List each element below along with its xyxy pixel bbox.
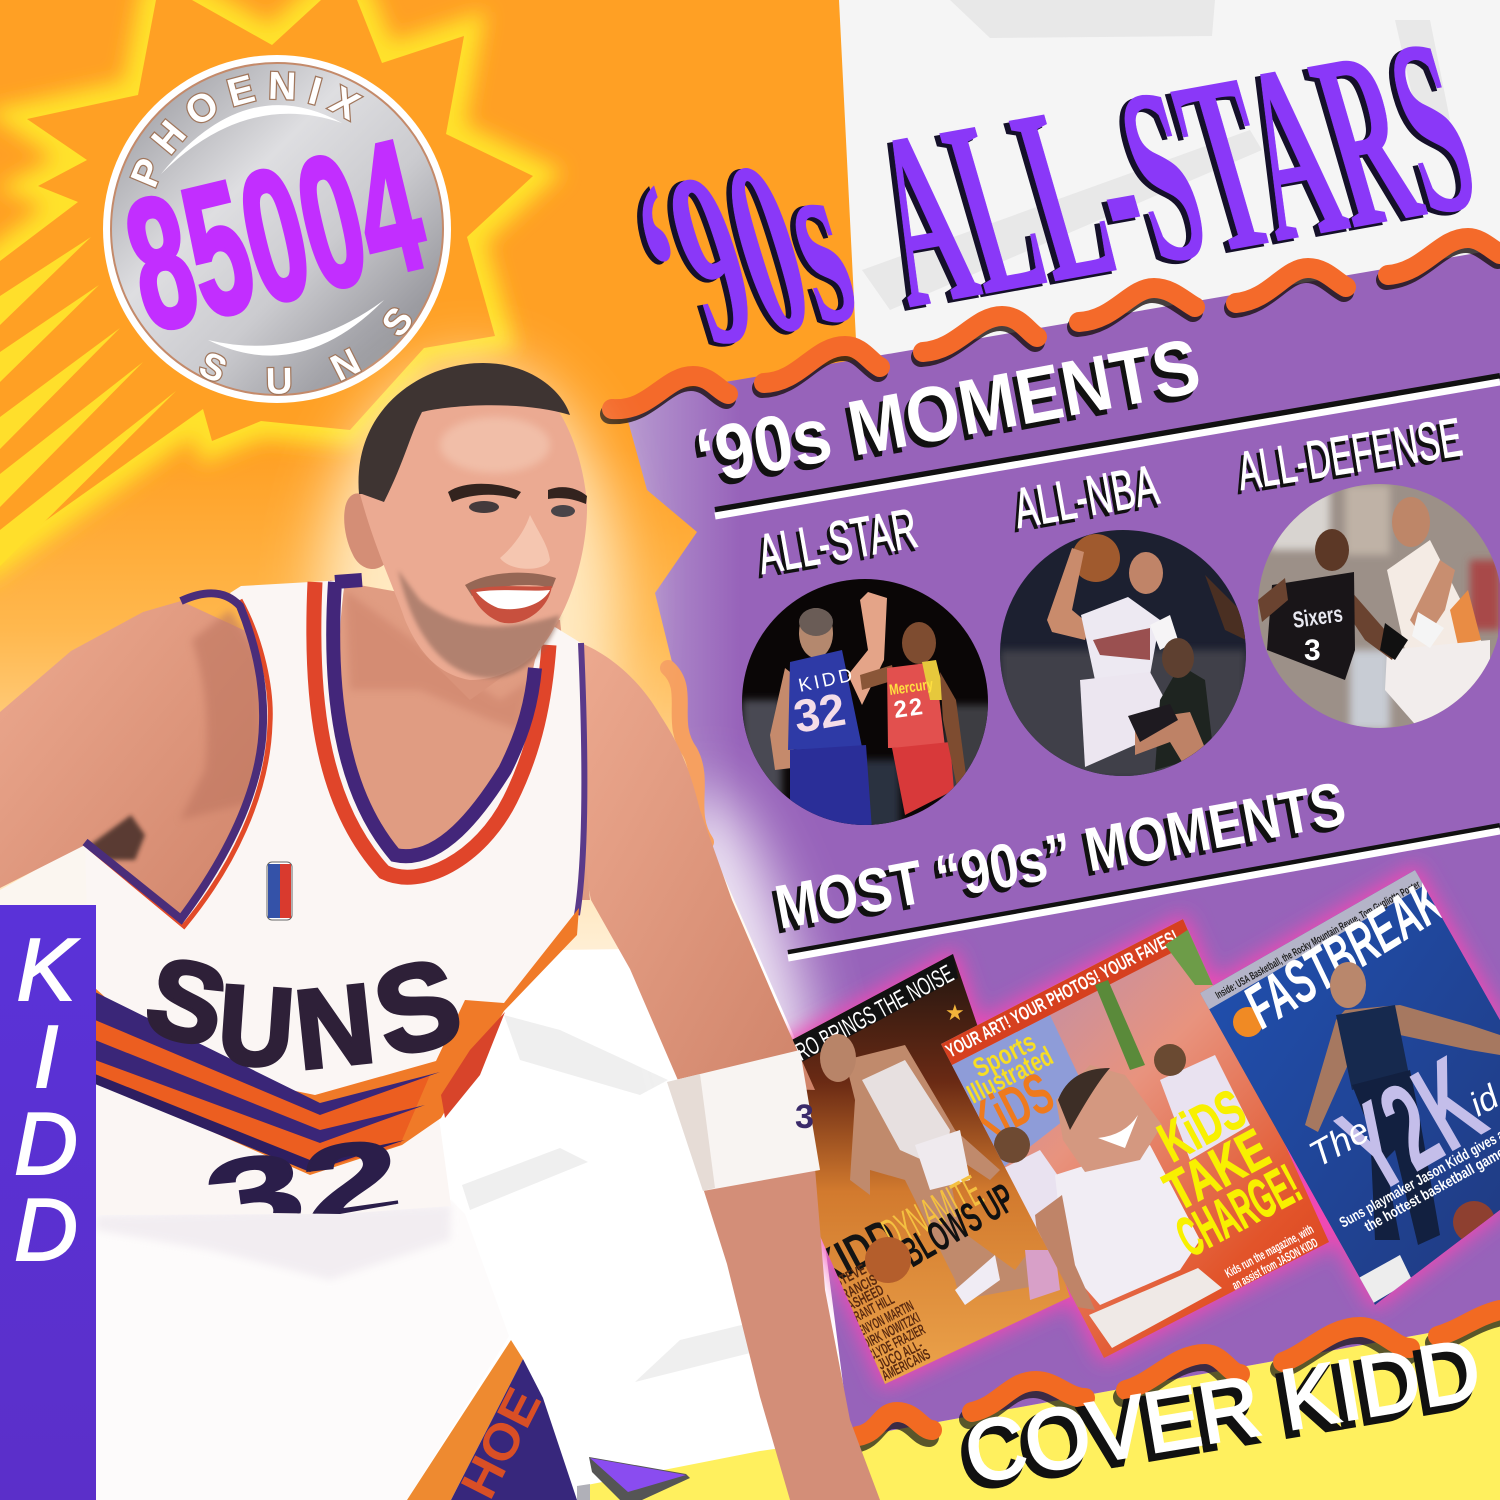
red side patch [441, 1012, 505, 1118]
player arms [1305, 1005, 1500, 1132]
basketball [1453, 1201, 1495, 1243]
label: ALL-STAR fill: ALL-STAR [753, 496, 922, 586]
chest shade [345, 590, 530, 730]
jersey word SUNS: N [289, 960, 380, 1093]
shorts purple trim [451, 1359, 577, 1500]
jersey word SUNS: S [361, 932, 473, 1083]
player body [845, 1045, 1040, 1300]
teammate arm [860, 665, 895, 690]
banner text: YOUR ART! YOUR PHOTOS! YOUR FAVES! [943, 927, 1182, 1062]
player wristband [1150, 615, 1178, 650]
defender [1155, 665, 1212, 770]
KIDD vertical text: K [17, 920, 79, 1019]
red banner [941, 919, 1193, 1066]
Kidd raised arm [848, 592, 887, 705]
Iverson wrist band [1380, 623, 1408, 660]
red lower fan [95, 1010, 430, 1172]
cover word BLOWS UP: BLOWS UP [893, 1174, 1022, 1276]
Kidd jersey [1055, 1145, 1200, 1305]
neck [395, 560, 550, 700]
label: ALL-NBA: ALL-NBA [1006, 457, 1160, 544]
teammate arm right [940, 672, 966, 784]
title: '90s [602, 102, 880, 407]
shorts [96, 1200, 509, 1500]
badge number: 85004: 85004 [109, 101, 441, 371]
jersey word SUNS [135, 932, 473, 1093]
crowd [1000, 650, 1246, 780]
heading: '90s MOMENTS: ‘90s MOMENTS [685, 327, 1203, 507]
panel fade to white near arm [639, 773, 861, 1287]
KIDD vertical text: I [34, 1007, 58, 1106]
wristband [667, 1050, 820, 1191]
kid left [1000, 1150, 1075, 1240]
heading: MOST "90s" MOMENTS: MOST “90s” MOMENTS [766, 775, 1347, 948]
player head [1129, 552, 1163, 594]
teammate shorts [892, 742, 954, 815]
armpit shade [90, 815, 145, 860]
Kids Take Charge: TAKE [1154, 1116, 1279, 1223]
Kidd head [1056, 1065, 1162, 1172]
purple panel [620, 249, 1500, 1438]
squiggles shadow [610, 243, 1498, 414]
orange fan [95, 908, 579, 1175]
heading: MOST "90s" MOMENTS fill: MOST “90s” MOMENTS [770, 770, 1351, 943]
cover side text: DIRK NOWITZKI [860, 1309, 923, 1353]
top black banner [745, 954, 958, 1090]
wristband number: 3 [795, 1098, 814, 1136]
right eye [551, 505, 575, 517]
background: white top right [839, 0, 1500, 420]
left arm [0, 601, 265, 925]
squiggles orange [858, 1310, 1500, 1436]
KIDD vertical text: D [14, 1180, 78, 1279]
title: '90s: ‘90s [602, 104, 875, 407]
jersey left armhole orange trim [90, 600, 270, 926]
crowd left [742, 696, 786, 796]
cover side text: JUCO ALL- [875, 1337, 926, 1374]
cover side text: GRANT HILL [845, 1291, 897, 1329]
right armhole trim [577, 643, 584, 915]
head [344, 363, 587, 700]
Kidd jersey orange [1450, 590, 1481, 645]
basketball [1072, 534, 1120, 582]
background: yellow bottom band [582, 1320, 1500, 1500]
shoe right [1025, 1250, 1060, 1300]
Kidd arm [1410, 560, 1455, 640]
KIDD vertical text [14, 920, 79, 1279]
Kidd jersey [1387, 540, 1481, 650]
cover side text: FRANCIS [833, 1271, 880, 1307]
Kids Take Charge: KiDS [1148, 1077, 1255, 1174]
top strip [1200, 870, 1425, 1010]
mouth [470, 586, 552, 623]
photo circle: all-star high five [742, 578, 995, 830]
teeth [476, 590, 550, 609]
blurred crowd top [1345, 485, 1390, 555]
orange side squiggle [668, 668, 706, 842]
cover side text: RASHEED [838, 1281, 887, 1318]
right eyebrow [548, 487, 587, 504]
squiggles shadow [855, 1317, 1497, 1443]
sunburst rays [0, 237, 176, 566]
squiggles orange [612, 238, 1500, 409]
heading: COVER KIDD fill: COVER KIDD [958, 1321, 1487, 1500]
player: Jason Kidd [0, 360, 880, 1500]
Iverson arm [1345, 590, 1400, 660]
Kidd hair [1058, 1068, 1110, 1130]
player shorts and legs [1352, 1070, 1440, 1245]
teammate trim [922, 660, 942, 700]
Iverson left arm [1258, 578, 1288, 622]
Kidd smile [1098, 1115, 1138, 1148]
defender arm [1205, 575, 1246, 640]
jersey word SUNS: S [135, 932, 238, 1071]
label: ALL-NBA [1006, 453, 1163, 544]
cover blurb: an assist from JASON KIDD [1229, 1235, 1320, 1293]
shorts orange trim [407, 1340, 523, 1500]
left eye [469, 501, 499, 513]
forehead highlight [440, 417, 550, 473]
jersey left armhole purple trim [85, 593, 263, 919]
banner text: ERO BRINGS THE NOISE [782, 960, 958, 1071]
kid right [1160, 1055, 1250, 1160]
cactus [1095, 980, 1145, 1070]
Suns logo [1233, 1007, 1263, 1037]
player knee brace [1128, 704, 1178, 742]
Kidd shorts [790, 745, 872, 830]
player jersey [1081, 597, 1160, 680]
left shoulder shade [180, 610, 262, 820]
defender head [1162, 638, 1194, 678]
badge bottom crescent [208, 300, 384, 356]
teammate text: Mercury [888, 676, 935, 699]
Iverson head [1315, 529, 1349, 571]
right shoulder and arm [570, 643, 815, 1090]
chest and neck [310, 580, 590, 900]
cover word DYNAMITE: DYNAMITE [875, 1166, 990, 1259]
title: '90s fill: ‘90s [607, 102, 880, 405]
magazine: SLAM-style Kidd cover [740, 950, 1080, 1390]
magazine pink glow [745, 870, 1500, 1384]
cover side text: KENYON MARTIN [850, 1297, 917, 1343]
player leg [1135, 712, 1204, 761]
NBA logo [267, 862, 292, 920]
heading: '90s MOMENTS fill: ‘90s MOMENTS [689, 321, 1207, 501]
teammate jersey [887, 662, 945, 748]
basketball [865, 1237, 911, 1283]
SI logo line 2: Illustrated [962, 1041, 1058, 1109]
orange squiggles top [610, 238, 1500, 414]
jersey word SUNS: U [214, 961, 298, 1091]
Kids Take Charge [1148, 1077, 1310, 1269]
sunburst star [0, 0, 533, 553]
SI logo KIDS: KiDS [958, 1060, 1064, 1157]
cover blurb [1222, 1221, 1320, 1305]
white patch left of jersey [0, 842, 100, 905]
sunburst glow [0, 0, 533, 553]
blurred crowd [1270, 490, 1330, 550]
cover side text: CLYDE FRAZIER [865, 1321, 928, 1365]
mustache [465, 573, 556, 596]
background: white lower area [0, 948, 900, 1500]
background: pale grey shapes lower [462, 1015, 762, 1382]
purple stripe 3 [95, 1074, 405, 1172]
cactus top [1165, 925, 1215, 985]
blurred crowd red [1470, 560, 1500, 630]
neckline orange trim [314, 582, 549, 877]
KIDD side bar [0, 905, 96, 1500]
player jersey [862, 1060, 950, 1170]
badge: Phoenix Suns 85004 [103, 55, 451, 403]
neckline purple trim [333, 580, 535, 856]
blue left border [950, 1015, 1090, 1170]
barcode [1355, 1255, 1412, 1305]
SI logo: Sports [968, 1027, 1041, 1083]
jersey stripes [1093, 628, 1150, 660]
teammate number: 22 [892, 693, 926, 724]
badge text: SUNS: SUNS [198, 307, 412, 396]
cover side text: STEVE [831, 1261, 869, 1292]
purple stripe 2 [95, 1040, 425, 1143]
Kidd head [799, 608, 833, 658]
Kidd blue jersey [788, 650, 862, 750]
cover blurb: of the Phoenix Suns [1236, 1258, 1307, 1305]
badge top crescent [161, 105, 342, 174]
player shorts [1080, 672, 1168, 767]
label: ALL-STAR [750, 496, 922, 590]
stubble [398, 570, 560, 678]
cover side text: AMERICANS [879, 1346, 933, 1385]
label: ALL-NBA fill: ALL-NBA [1009, 453, 1163, 540]
crowd centre [860, 760, 900, 830]
hair [359, 363, 570, 502]
Kidd head [1392, 497, 1430, 547]
photo circle: all-NBA layup [1000, 530, 1246, 780]
jersey number: 32 [198, 1115, 408, 1264]
teammate head [902, 622, 936, 664]
stars: ★ [945, 1000, 965, 1025]
label: ALL-STAR: ALL-STAR [750, 500, 919, 590]
Kids Take Charge: CHARGE! [1166, 1152, 1310, 1269]
kid left head [994, 1127, 1030, 1163]
shorts fold shading [96, 1205, 451, 1280]
Kidd hair [799, 608, 833, 636]
magazine: Fastbreak Y2Kid [1200, 865, 1500, 1305]
divider line bottom [788, 826, 1500, 958]
wristband shade [667, 1074, 715, 1191]
Kidd number: 32 [790, 683, 849, 743]
Iverson number: 3 [1304, 634, 1321, 667]
Iverson logo: Sixers [1291, 600, 1344, 633]
bottom orange squiggles [855, 1310, 1500, 1443]
ticket stub [1089, 1268, 1222, 1348]
ear [344, 493, 388, 569]
crowd right [941, 701, 988, 798]
cover blurb: Kids run the magazine, with [1222, 1221, 1316, 1281]
Iverson jersey [1267, 572, 1355, 680]
Kidd shorts [1385, 640, 1490, 730]
kid right head [1154, 1044, 1186, 1076]
Kidd arm lower [770, 668, 794, 770]
background: pale grey shapes behind title [862, 0, 1450, 310]
Kidd arm [1035, 1195, 1095, 1310]
jersey body [85, 580, 584, 1215]
purple stripe 1 [95, 992, 440, 1115]
player head [820, 1034, 856, 1082]
magazine: Sports Illustrated for Kids [935, 915, 1335, 1365]
player head [1330, 962, 1366, 1008]
face [360, 363, 587, 680]
blurred crowd patch [1350, 650, 1390, 730]
shoe left [955, 1255, 1000, 1305]
divider line top [715, 376, 1500, 516]
player arm up [1047, 548, 1090, 640]
cover word KIDD: KIDD [804, 1208, 906, 1298]
Kidd name: KIDD [797, 664, 857, 697]
badge text: PHOENIX: PHOENIX [129, 70, 364, 189]
sunburst logo [0, 0, 533, 566]
forearm and hand [703, 1168, 880, 1500]
decorative prism bottom [577, 1457, 690, 1500]
left eyebrow [448, 484, 521, 502]
Kidd wrist [1412, 612, 1444, 648]
player shorts [915, 1130, 970, 1190]
KIDD vertical text: D [14, 1094, 78, 1193]
jersey sunburst stripes [95, 908, 579, 1175]
cover side text [831, 1261, 933, 1385]
nose [500, 515, 550, 569]
player vest [1336, 1005, 1409, 1090]
photo circle: all-defense [1258, 484, 1500, 730]
player glow [320, 360, 620, 840]
The: The [1302, 1109, 1376, 1175]
